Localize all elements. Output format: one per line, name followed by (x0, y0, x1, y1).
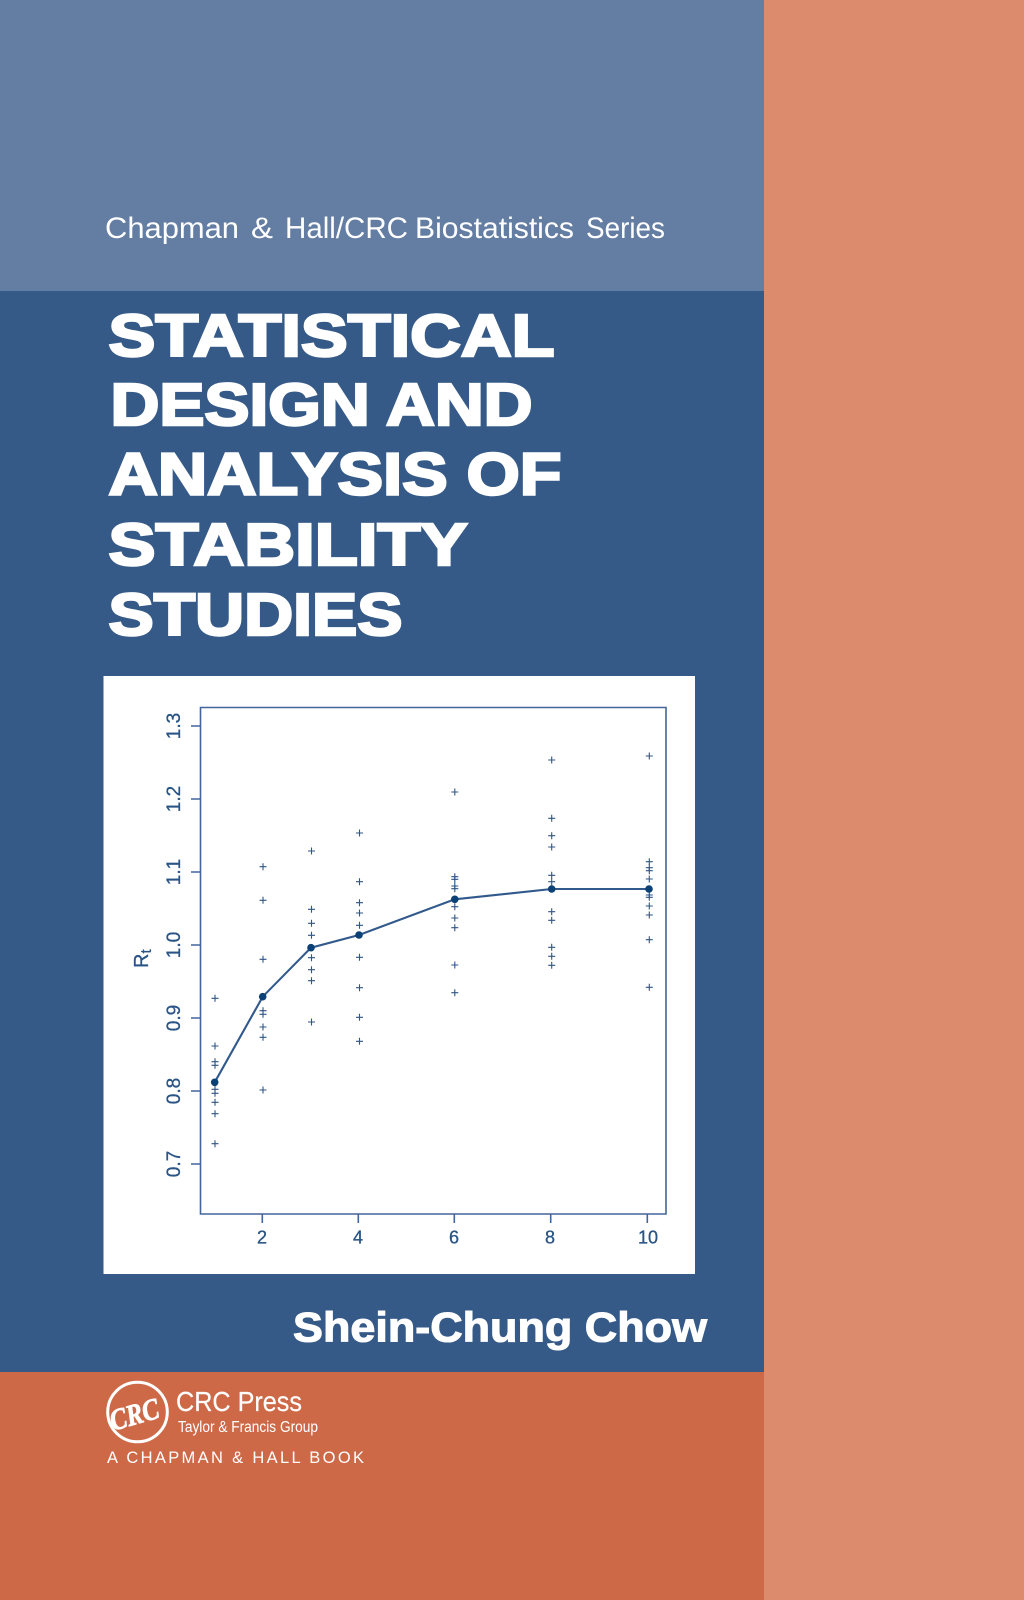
y axis labels: 1.1 (164, 859, 185, 885)
x axis labels: 8 (545, 1228, 555, 1248)
y axis labels: 0.8 (164, 1078, 185, 1104)
series name: Chapman (105, 212, 239, 245)
publisher group: Taylor & Francis Group (178, 1419, 318, 1436)
publisher logo (106, 1382, 364, 1467)
y axis labels: 1.3 (164, 713, 185, 739)
title (108, 303, 562, 648)
publisher name: CRC Press (176, 1386, 302, 1417)
mean markers (211, 885, 653, 1086)
x axis labels: 2 (257, 1228, 267, 1248)
title: STUDIES (108, 582, 402, 648)
mean trend line (215, 889, 649, 1082)
scatter points (212, 752, 653, 1147)
title: DESIGN AND (110, 372, 532, 438)
series name: Biostatistics (415, 212, 574, 245)
y axis labels: 1.0 (164, 932, 185, 958)
panel: top slate band (0, 0, 764, 291)
series name: Hall/CRC (285, 212, 408, 245)
y axis title: R (131, 954, 153, 968)
scatter chart (131, 708, 666, 1248)
panel: main blue band (0, 291, 764, 1372)
y axis title: t (138, 949, 155, 954)
icon: CRC circle emblem: CRC (106, 1392, 164, 1438)
panel: right orange band (764, 0, 1024, 1600)
x axis labels (257, 1228, 658, 1248)
author: Shein-Chung Chow (293, 1304, 707, 1350)
title: STATISTICAL (108, 303, 554, 369)
x axis labels: 6 (449, 1228, 459, 1248)
title: STABILITY (108, 512, 468, 578)
chart panel: white background (104, 676, 695, 1274)
y axis labels: 0.7 (164, 1151, 185, 1177)
series name: Series (586, 212, 665, 245)
panel: bottom orange band (0, 1372, 764, 1600)
series name: & (251, 212, 273, 245)
y axis labels: 1.2 (164, 786, 185, 812)
x axis labels: 4 (353, 1228, 363, 1248)
x axis labels: 10 (638, 1228, 658, 1248)
y axis labels: 0.9 (164, 1005, 185, 1031)
series name (105, 212, 665, 245)
imprint line: A CHAPMAN & HALL BOOK (107, 1449, 364, 1467)
chart frame and ticks (191, 708, 666, 1223)
title: ANALYSIS OF (108, 441, 562, 507)
y axis labels (164, 713, 185, 1177)
